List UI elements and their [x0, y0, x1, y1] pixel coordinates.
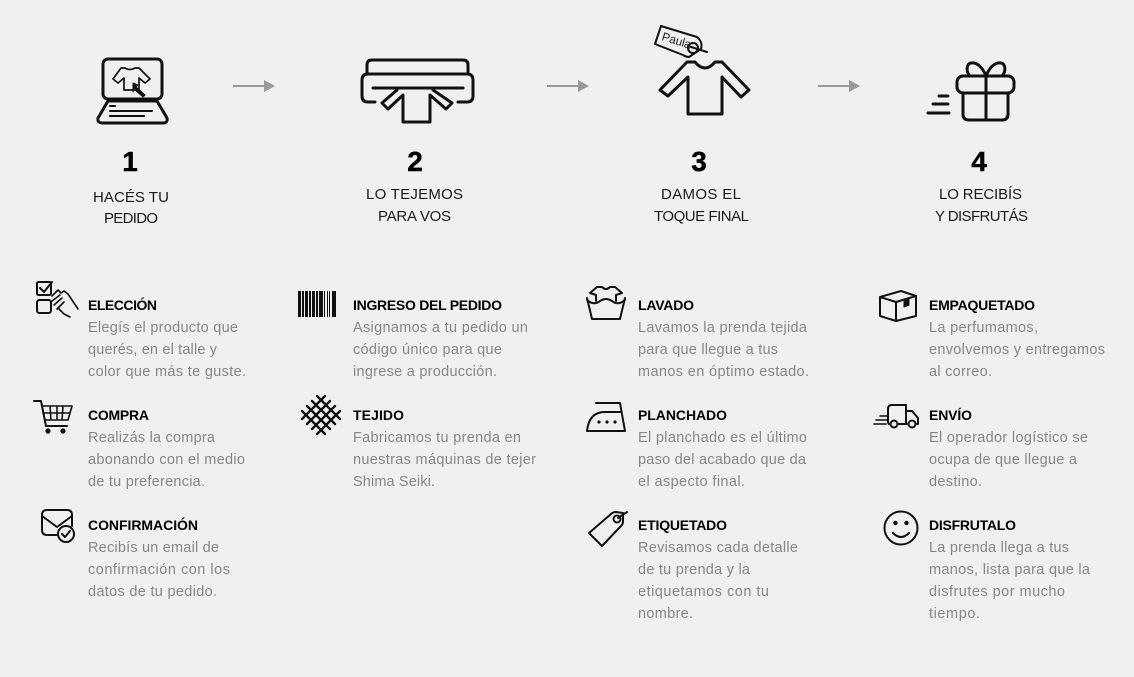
icon: laptop with shirt: [98, 59, 167, 123]
item: planchado: paso del acabado que da: [638, 452, 807, 468]
step label 1: PEDIDO: [104, 210, 158, 227]
item: disfrutalo: La prenda llega a tus: [929, 540, 1069, 556]
item: empaquetado: La perfumamos,: [929, 320, 1038, 336]
item: compra: [34, 401, 245, 490]
column 3: [587, 287, 809, 622]
step label 3: TOQUE FINAL: [654, 208, 749, 225]
icon: wash tub with shirt: [587, 287, 625, 319]
item: ingreso del pedido: [298, 291, 528, 380]
icon: mail with check: [42, 510, 74, 542]
item: lavado: manos en óptimo estado.: [638, 364, 809, 380]
item: empaquetado: [880, 291, 1105, 380]
item: planchado: [587, 403, 807, 490]
step 4: lo recibís: [928, 63, 1028, 225]
item: confirmación: CONFIRMACIÓN: [88, 516, 198, 533]
item: confirmación: Recibís un email de: [88, 540, 219, 556]
column 2: [298, 291, 536, 490]
item: empaquetado: envolvemos y entregamos: [929, 342, 1105, 358]
item: elección: color que más te guste.: [88, 364, 246, 380]
icon: tag: [589, 512, 627, 546]
icon: shirt with tag: [655, 26, 749, 114]
icon: smiley: [884, 512, 918, 544]
item: compra: Realizás la compra: [88, 430, 216, 446]
item: lavado: Lavamos la prenda tejida: [638, 320, 808, 336]
column 1: [34, 282, 246, 600]
item: envío: ENVÍO: [929, 407, 972, 423]
item: ingreso del pedido: Asignamos a tu pedido un: [353, 320, 528, 336]
icon: shirt with tag: Paula: [660, 29, 693, 52]
icon: gift with speed lines: [928, 63, 1014, 120]
step label 1: HACÉS TU: [93, 189, 169, 206]
item: envío: ocupa de que llegue a: [929, 452, 1078, 468]
arrow 3: [818, 80, 860, 92]
icon: iron: [587, 403, 625, 431]
step 1: hacés tu pedido: [93, 59, 169, 227]
item: confirmación: datos de tu pedido.: [88, 584, 217, 600]
column 4: [874, 291, 1105, 622]
item: etiquetado: nombre.: [638, 606, 693, 622]
icon: barcode: [298, 291, 336, 317]
item: confirmación: [42, 510, 230, 600]
item: etiquetado: ETIQUETADO: [638, 517, 727, 533]
item: lavado: para que llegue a tus: [638, 342, 778, 358]
step number 2: 2: [407, 146, 423, 177]
step number 1: 1: [122, 146, 138, 177]
step label 3: DAMOS EL: [661, 186, 741, 203]
item: etiquetado: de tu prenda y la: [638, 562, 751, 578]
icon: truck: [874, 405, 918, 428]
item: elección: Elegís el producto que: [88, 320, 238, 336]
icon: checklist hand: [37, 282, 78, 317]
item: disfrutalo: DISFRUTALO: [929, 517, 1016, 533]
step 3: toque final: [654, 26, 749, 225]
item: envío: destino.: [929, 474, 982, 490]
step 2: lo tejemos: [362, 60, 473, 225]
item: planchado: PLANCHADO: [638, 407, 727, 423]
item: etiquetado: etiquetamos con tu: [638, 584, 769, 600]
item: compra: abonando con el medio: [88, 452, 245, 468]
item: planchado: el aspecto final.: [638, 474, 745, 490]
step label 2: LO TEJEMOS: [366, 186, 463, 203]
step label 4: LO RECIBÍS: [939, 186, 1022, 203]
item: ingreso del pedido: código único para que: [353, 342, 502, 358]
item: tejido: Fabricamos tu prenda en: [353, 430, 521, 446]
icon: cart: [34, 401, 72, 433]
item: disfrutalo: manos, lista para que la: [929, 562, 1091, 578]
item: envío: El operador logístico se: [929, 430, 1088, 446]
item: etiquetado: [589, 512, 798, 622]
item: tejido: nuestras máquinas de tejer: [353, 452, 536, 468]
item: compra: COMPRA: [88, 407, 149, 423]
item: etiquetado: Revisamos cada detalle: [638, 540, 798, 556]
item: ingreso del pedido: ingrese a producción.: [353, 364, 497, 380]
item: tejido: [302, 396, 536, 490]
item: elección: [37, 282, 246, 380]
icon: box: [880, 291, 916, 321]
item: empaquetado: al correo.: [929, 364, 992, 380]
icon: knitting machine: [362, 60, 473, 122]
item: compra: de tu preferencia.: [88, 474, 205, 490]
item: elección: querés, en el talle y: [88, 342, 218, 358]
item: tejido: Shima Seiki.: [353, 474, 435, 490]
item: elección: ELECCIÓN: [88, 296, 157, 313]
item: lavado: LAVADO: [638, 297, 694, 313]
item: disfrutalo: disfrutes por mucho: [929, 584, 1065, 600]
item: ingreso del pedido: INGRESO DEL PEDIDO: [353, 297, 502, 313]
step label 2: PARA VOS: [378, 208, 451, 225]
item: tejido: TEJIDO: [353, 407, 404, 423]
arrow 1: [233, 80, 275, 92]
step number 4: 4: [971, 146, 987, 177]
item: envío: [874, 405, 1088, 490]
item: confirmación: confirmación con los: [88, 562, 230, 578]
step number 3: 3: [691, 146, 707, 177]
item: lavado: [587, 287, 809, 380]
item: empaquetado: EMPAQUETADO: [929, 297, 1035, 313]
item: disfrutalo: tiempo.: [929, 606, 980, 622]
item: planchado: El planchado es el último: [638, 430, 807, 446]
item: disfrutalo: [884, 512, 1091, 622]
arrow 2: [547, 80, 589, 92]
icon: knit lattice: [302, 396, 340, 434]
step label 4: Y DISFRUTÁS: [935, 208, 1028, 225]
